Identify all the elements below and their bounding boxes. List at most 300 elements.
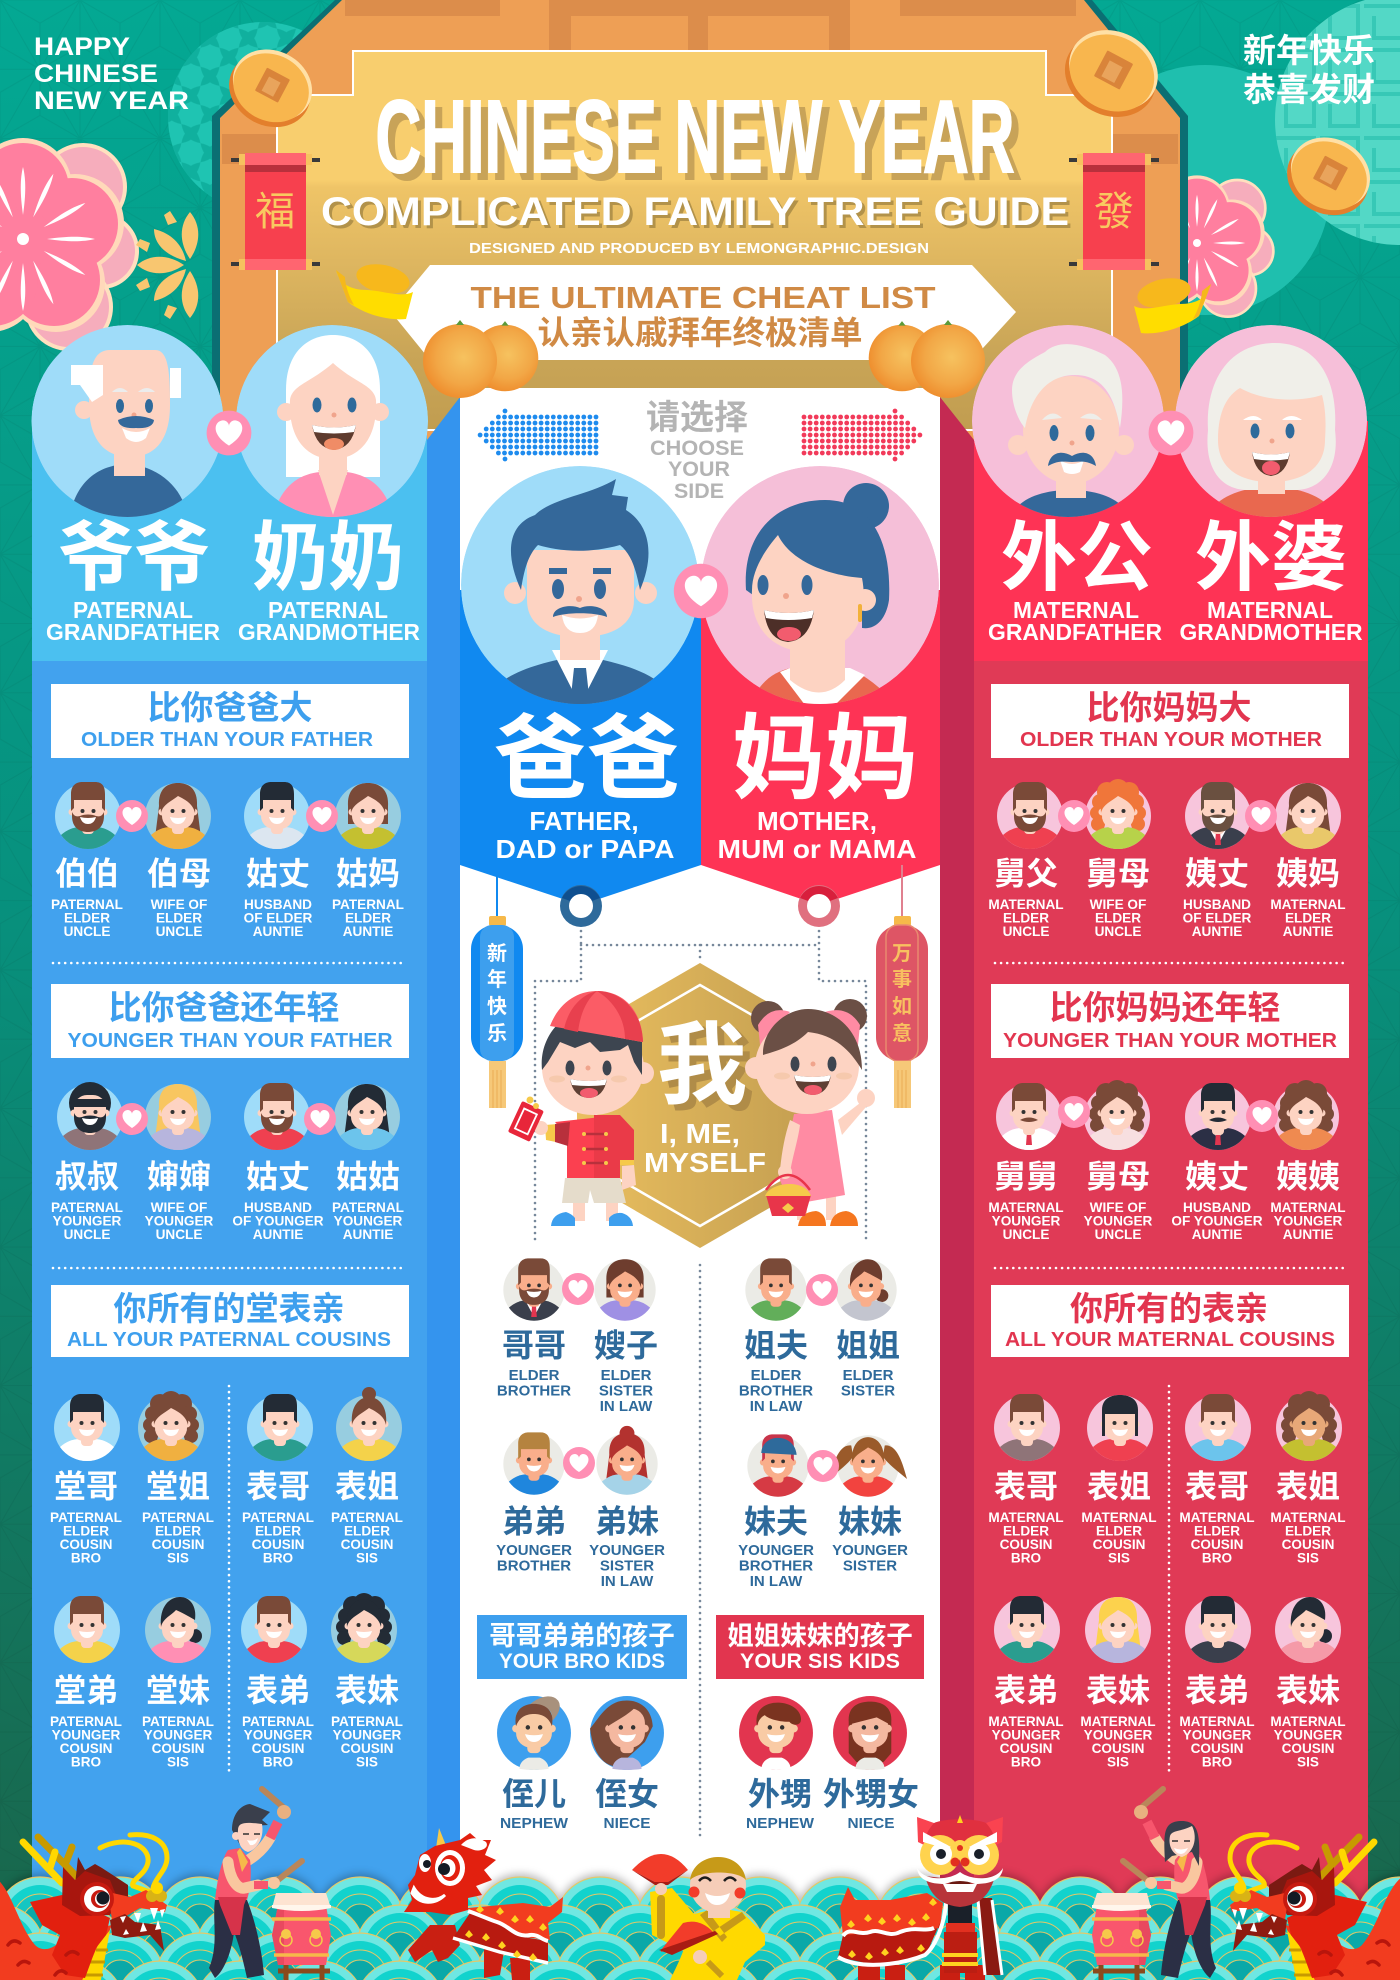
person: tang di: PATERNAL [50, 1714, 122, 1729]
label: father: DAD or PAPA [496, 834, 675, 864]
person: biao ge m1 [988, 1394, 1064, 1566]
person: jiu mu: WIFE OF [1090, 897, 1146, 912]
person: biao jie m1: SIS [1108, 1550, 1130, 1566]
text: chinese greeting [1243, 32, 1375, 108]
person: yi zhang [1183, 782, 1252, 939]
kid: niece maternal: NIECE [848, 1815, 894, 1832]
person: tang ge: COUSIN [60, 1537, 112, 1552]
icon: heart parents [674, 564, 728, 618]
label: wai gong: 外公 [1001, 516, 1153, 601]
sibling: jie jie: SISTER [841, 1383, 895, 1400]
person: biao jie: 表姐 [335, 1468, 399, 1504]
person: gu gu: AUNTIE [343, 1227, 393, 1242]
sibling: mei mei: SISTER [843, 1558, 897, 1575]
person: tang ge: ELDER [63, 1524, 109, 1538]
person: shen shen: 婶婶 [147, 1158, 211, 1194]
box: all your paternal cousins [51, 1285, 409, 1357]
sibling: sao zi: SISTER [599, 1383, 653, 1400]
person: biao jie: SIS [356, 1550, 378, 1566]
person: shu shu: PATERNAL [51, 1200, 123, 1215]
person: biao di: BRO [263, 1754, 293, 1770]
person: biao di m2: MATERNAL [1179, 1714, 1255, 1729]
person: biao mei: YOUNGER [333, 1728, 402, 1742]
panel: mother tab [701, 590, 940, 905]
credit line: DESIGNED AND PRODUCED BY LEMONGRAPHIC.DESIGN [469, 241, 929, 257]
icon: coin top right [1050, 14, 1173, 133]
person: yi ma: MATERNAL [1270, 897, 1346, 912]
monk with fan [632, 1854, 765, 1980]
label: wai po: 外婆 [1195, 516, 1347, 601]
person: biao di m1 [988, 1596, 1064, 1770]
heading: choose your side: YOUR [668, 458, 730, 481]
person: biao ge m1: 表哥 [994, 1468, 1058, 1504]
label: father: 爸爸 [494, 707, 680, 811]
icon: red lantern [876, 865, 928, 1108]
person: shen shen [145, 1084, 214, 1242]
sibling: jie fu: ELDER [751, 1367, 801, 1384]
person: biao ge: PATERNAL [242, 1510, 314, 1525]
panel: maternal side [974, 421, 1368, 1911]
person: shen shen: YOUNGER [145, 1214, 214, 1228]
person: biao ge: COUSIN [252, 1537, 304, 1552]
subtitle: COMPLICATED FAMILY TREE GUIDE [321, 190, 1069, 234]
icon: blue lantern: 乐 [487, 1022, 507, 1045]
icon: oranges right [869, 320, 985, 398]
sibling: mei fu [738, 1434, 814, 1590]
person: biao mei m2: COUSIN [1282, 1741, 1334, 1756]
portrait: paternal grandfather [32, 325, 224, 520]
sibling: di mei: SISTER [600, 1558, 654, 1575]
icon: heart [562, 1273, 594, 1305]
lion dancer right [838, 1815, 1003, 1980]
person: yi zhang younger: 姨丈 [1185, 1158, 1249, 1194]
icon: heart grandparents left [207, 411, 251, 455]
kid: niece paternal [590, 1696, 664, 1832]
badge: hexagon i me myself: I, ME, [660, 1118, 740, 1149]
person: yi zhang younger: OF YOUNGER [1171, 1214, 1263, 1228]
scroll: fa [1069, 153, 1159, 270]
person: shen shen: UNCLE [156, 1227, 202, 1242]
person: gu ma: PATERNAL [332, 897, 404, 912]
sibling: ge ge [497, 1258, 571, 1400]
icon: blue lantern [471, 865, 523, 1108]
person: biao jie [331, 1387, 403, 1566]
person: biao di m1: MATERNAL [988, 1714, 1064, 1729]
icon: ring father [560, 885, 602, 927]
sibling: di mei: YOUNGER [589, 1542, 665, 1559]
box: older than your father: 比你爸爸大 [148, 689, 312, 726]
person: biao mei m1: YOUNGER [1084, 1728, 1153, 1742]
sibling: jie fu [739, 1258, 813, 1415]
person: biao mei m1: MATERNAL [1080, 1714, 1156, 1729]
person: biao mei: SIS [356, 1754, 378, 1770]
person: biao di: COUSIN [252, 1741, 304, 1756]
person: biao di m1: COUSIN [1000, 1741, 1052, 1756]
badge: hexagon i me myself [577, 963, 823, 1248]
person: biao jie m1: COUSIN [1093, 1537, 1145, 1552]
icon: heart grandparents right [1149, 411, 1193, 455]
person: jiu fu [988, 782, 1064, 939]
sibling: ge ge: ELDER [509, 1367, 559, 1384]
person: jiu mu: 舅母 [1086, 856, 1150, 892]
heading: choose your side: CHOOSE [650, 437, 744, 460]
box: all your maternal cousins [991, 1285, 1349, 1357]
kid: niece paternal: NIECE [604, 1815, 650, 1832]
person: biao ge m2: COUSIN [1191, 1537, 1243, 1552]
icon: red lantern: 事 [892, 968, 912, 991]
panel: center white column [427, 388, 974, 1910]
person: tang mei: COUSIN [152, 1741, 204, 1756]
person: gu zhang [244, 782, 313, 939]
person: tang di [50, 1596, 122, 1770]
sibling: sao zi: 嫂子 [594, 1328, 658, 1364]
label: nai nai: 奶奶 [252, 516, 404, 601]
label: wai gong: GRANDFATHER [988, 619, 1162, 645]
person: jiu jiu [988, 1083, 1064, 1242]
person: yi zhang younger: AUNTIE [1192, 1227, 1242, 1242]
person: biao jie m2: MATERNAL [1270, 1510, 1346, 1525]
character: girl [745, 999, 875, 1226]
person: yi zhang: HUSBAND [1183, 897, 1251, 912]
person: shu shu: 叔叔 [55, 1158, 119, 1194]
person: biao di m2: YOUNGER [1183, 1728, 1252, 1742]
person: yi zhang: AUNTIE [1192, 924, 1242, 939]
label: wai gong: MATERNAL [1013, 597, 1139, 623]
sibling: di di: YOUNGER [496, 1542, 572, 1559]
sibling: sao zi: ELDER [601, 1367, 651, 1384]
box: younger than your father [51, 984, 409, 1058]
sibling: ge ge: 哥哥 [502, 1328, 566, 1364]
icon: coin top left [216, 35, 326, 141]
person: tang mei: YOUNGER [144, 1728, 213, 1742]
person: gu ma: AUNTIE [343, 924, 393, 939]
person: yi yi: YOUNGER [1274, 1214, 1343, 1228]
person: jiu fu: MATERNAL [988, 897, 1064, 912]
person: biao mei: COUSIN [341, 1741, 393, 1756]
icon: large plum flower [0, 138, 137, 349]
icon: oranges left [423, 320, 538, 398]
sibling: jie fu: 姐夫 [744, 1328, 808, 1364]
person: gu ma: ELDER [345, 910, 391, 926]
box: older than your mother: OLDER THAN YOUR MOTHER [1020, 729, 1323, 751]
person: tang ge [50, 1394, 122, 1566]
person: tang jie: 堂姐 [146, 1468, 210, 1504]
person: biao jie: PATERNAL [331, 1510, 403, 1525]
sibling: di mei: IN LAW [601, 1573, 654, 1590]
person: bo bo [51, 782, 123, 939]
person: biao mei m1: SIS [1107, 1754, 1129, 1770]
portrait: maternal grandmother [1175, 325, 1367, 520]
ribbon: the ultimate cheat list: THE ULTIMATE CHEAT LIST [470, 280, 936, 315]
icon: gold ingot right [1134, 274, 1211, 333]
title: CHINESE NEW YEAR [376, 79, 1014, 194]
person: yi yi: 姨姨 [1276, 1158, 1340, 1194]
sibling: di di: BROTHER [497, 1558, 571, 1575]
person: biao mei m1 [1080, 1597, 1156, 1770]
person: biao ge m1: ELDER [1003, 1524, 1049, 1538]
person: jiu jiu: 舅舅 [994, 1158, 1058, 1194]
character: boy [508, 991, 654, 1226]
person: bo bo: PATERNAL [51, 897, 123, 912]
sibling: jie jie: ELDER [843, 1367, 893, 1384]
person: tang mei: SIS [167, 1754, 189, 1770]
person: gu zhang younger: OF YOUNGER [232, 1214, 324, 1228]
label: mother: MUM or MAMA [718, 834, 917, 864]
box: older than your mother [991, 684, 1349, 758]
person: tang jie: ELDER [155, 1524, 201, 1538]
waves [0, 1877, 1400, 1980]
person: gu zhang: 姑丈 [246, 856, 310, 892]
person: yi zhang younger [1171, 1083, 1263, 1242]
person: gu zhang younger: 姑丈 [246, 1158, 310, 1194]
icon: gold ingot left [336, 260, 413, 319]
person: biao di m1: 表弟 [994, 1672, 1058, 1708]
box: all your maternal cousins: 你所有的表亲 [1070, 1290, 1268, 1327]
person: yi ma [1270, 783, 1346, 939]
person: biao jie m1: 表姐 [1087, 1468, 1151, 1504]
scroll: fu [231, 153, 320, 270]
person: jiu mu younger: 舅母 [1086, 1158, 1150, 1194]
person: bo mu [145, 783, 211, 939]
sibling: jie jie: 姐姐 [836, 1328, 900, 1364]
person: biao jie m1 [1081, 1395, 1157, 1566]
box: all your maternal cousins: ALL YOUR MATERNAL COUSINS [1005, 1329, 1335, 1351]
sibling: mei fu: YOUNGER [738, 1542, 814, 1559]
person: biao mei m1: COUSIN [1092, 1741, 1144, 1756]
person: biao ge m1: COUSIN [1000, 1537, 1052, 1552]
box: younger than your father: YOUNGER THAN YOUR FATHER [68, 1030, 393, 1052]
text: happy chinese new year: NEW YEAR [34, 87, 189, 115]
person: biao jie m2: SIS [1297, 1550, 1319, 1566]
label: wai po [1180, 516, 1363, 645]
box: your sis kids: YOUR SIS KIDS [740, 1650, 900, 1673]
person: biao di [241, 1596, 314, 1770]
icon: heart [116, 1103, 148, 1135]
icon: red lantern: 意 [892, 1021, 912, 1045]
person: bo bo: 伯伯 [55, 856, 119, 892]
person: biao jie m1: MATERNAL [1081, 1510, 1157, 1525]
box: your sis kids [716, 1615, 924, 1679]
ribbon: the ultimate cheat list: 认亲认戚拜年终极清单 [537, 315, 863, 351]
person: bo mu: UNCLE [156, 924, 202, 939]
box: older than your father: OLDER THAN YOUR FATHER [81, 729, 374, 751]
person: shu shu [51, 1082, 123, 1242]
family tree connector lines [535, 925, 866, 1840]
icon: heart [806, 1274, 838, 1306]
person: tang mei [142, 1597, 214, 1770]
panel: paternal side [32, 421, 427, 1911]
drummer right [1092, 1789, 1216, 1980]
person: biao jie m1: ELDER [1096, 1524, 1142, 1538]
icon: heart [563, 1447, 595, 1479]
person: tang ge: 堂哥 [54, 1468, 118, 1504]
icon: ring mother [798, 885, 840, 927]
person: biao jie m2: COUSIN [1282, 1537, 1334, 1552]
box: all your paternal cousins: ALL YOUR PATERNAL COUSINS [67, 1329, 391, 1351]
drummer left [209, 1789, 331, 1980]
sibling: mei mei: 妹妹 [838, 1504, 902, 1540]
icon: heart [1058, 800, 1090, 832]
sibling: mei fu: IN LAW [750, 1573, 803, 1590]
person: biao ge m1: MATERNAL [988, 1510, 1064, 1525]
icon: coin right [1274, 123, 1384, 229]
kid: nephew maternal: NEPHEW [746, 1815, 815, 1832]
person: bo mu: 伯母 [147, 856, 211, 892]
person: shu shu: YOUNGER [53, 1214, 122, 1228]
label: mother: MOTHER, [757, 806, 877, 836]
person: gu gu: PATERNAL [332, 1200, 404, 1215]
person: tang jie: SIS [167, 1550, 189, 1566]
person: bo mu: ELDER [156, 910, 202, 926]
person: biao jie: COUSIN [341, 1537, 393, 1552]
box: younger than your mother [991, 984, 1349, 1058]
heading: choose your side [646, 399, 748, 503]
person: jiu mu younger: UNCLE [1095, 1227, 1141, 1242]
person: tang di: COUSIN [60, 1741, 112, 1756]
person: biao ge m2: MATERNAL [1179, 1510, 1255, 1525]
person: biao ge: ELDER [255, 1524, 301, 1538]
person: tang di: BRO [71, 1754, 101, 1770]
label: ye ye: GRANDFATHER [46, 619, 220, 645]
sibling: mei fu: BROTHER [739, 1558, 813, 1575]
text: chinese greeting: 恭喜发财 [1243, 71, 1375, 108]
person: biao di m1: YOUNGER [992, 1728, 1061, 1742]
person: jiu mu younger: WIFE OF [1090, 1200, 1146, 1215]
person: biao mei m2: YOUNGER [1274, 1728, 1343, 1742]
person: tang jie: PATERNAL [142, 1510, 214, 1525]
box: younger than your mother: 比你妈妈还年轻 [1050, 989, 1280, 1026]
icon: blue lantern: 新 [487, 942, 507, 965]
text: happy chinese new year: CHINESE [34, 60, 158, 88]
box: younger than your father: 比你爸爸还年轻 [108, 989, 340, 1026]
kid: nephew paternal: NEPHEW [500, 1815, 569, 1832]
label: father: FATHER, [529, 806, 639, 836]
person: jiu mu younger [1084, 1080, 1153, 1242]
label: wai po: MATERNAL [1207, 597, 1333, 623]
person: jiu jiu: UNCLE [1003, 1227, 1049, 1242]
person: yi ma: ELDER [1285, 910, 1331, 926]
scroll: fu: 福 [255, 190, 295, 234]
kid: nephew paternal [497, 1690, 571, 1832]
label: father [494, 707, 680, 864]
person: yi yi: MATERNAL [1270, 1200, 1346, 1215]
sibling: ge ge: BROTHER [497, 1383, 571, 1400]
icon: heart [807, 1450, 839, 1482]
box: your bro kids [477, 1615, 687, 1679]
sibling: mei fu: 妹夫 [744, 1504, 808, 1540]
person: biao ge: BRO [263, 1550, 293, 1566]
sibling: di mei: 弟妹 [595, 1504, 659, 1540]
person: biao ge m2: ELDER [1194, 1524, 1240, 1538]
sibling: sao zi: IN LAW [600, 1398, 653, 1415]
person: gu gu [332, 1084, 404, 1242]
person: biao di m1: BRO [1011, 1754, 1041, 1770]
sibling: jie fu: BROTHER [739, 1383, 813, 1400]
text: happy chinese new year [34, 33, 189, 115]
sibling: jie fu: IN LAW [750, 1398, 803, 1415]
person: gu gu: 姑姑 [336, 1158, 400, 1194]
box: your bro kids: YOUR BRO KIDS [499, 1650, 665, 1673]
person: tang ge: PATERNAL [50, 1510, 122, 1525]
box: older than your mother: 比你妈妈大 [1086, 689, 1252, 726]
person: gu zhang younger: HUSBAND [244, 1200, 312, 1215]
person: jiu fu: UNCLE [1003, 924, 1049, 939]
lion dancer left [404, 1828, 563, 1980]
heading: choose your side: 请选择 [646, 399, 748, 437]
person: bo bo: ELDER [64, 910, 110, 926]
dragon left [0, 1835, 167, 1980]
person: biao jie m2: 表姐 [1276, 1468, 1340, 1504]
label: nai nai [238, 516, 420, 645]
label: ye ye [46, 516, 220, 645]
label: nai nai: PATERNAL [268, 597, 388, 623]
person: bo bo: UNCLE [64, 924, 110, 939]
person: tang di: YOUNGER [52, 1728, 121, 1742]
portrait: father [461, 466, 699, 705]
arrow: dotted blue left [475, 399, 596, 471]
person: biao ge [242, 1394, 314, 1566]
icon: red lantern: 如 [892, 995, 912, 1018]
ribbon: the ultimate cheat list [391, 265, 1016, 360]
icon: heart [304, 1103, 336, 1135]
kid: nephew maternal [739, 1696, 815, 1832]
person: biao di m2: BRO [1202, 1754, 1232, 1770]
heading: choose your side: SIDE [674, 480, 724, 503]
person: biao mei m2 [1270, 1597, 1346, 1770]
kid: nephew maternal: 外甥 [748, 1776, 812, 1812]
person: gu ma [332, 783, 404, 939]
person: biao mei m1: 表妹 [1086, 1672, 1150, 1708]
person: tang di: 堂弟 [54, 1672, 118, 1708]
person: gu zhang younger [232, 1083, 324, 1242]
person: yi yi: AUNTIE [1283, 1227, 1333, 1242]
person: yi zhang: OF ELDER [1183, 910, 1252, 926]
label: ye ye: 爷爷 [58, 516, 210, 601]
person: biao mei: 表妹 [335, 1672, 399, 1708]
label: wai gong [988, 516, 1162, 645]
person: jiu jiu: YOUNGER [992, 1214, 1061, 1228]
person: tang mei: PATERNAL [142, 1714, 214, 1729]
sibling: di di [496, 1432, 572, 1575]
sibling: mei mei [829, 1435, 908, 1575]
person: biao mei: PATERNAL [331, 1714, 403, 1729]
person: jiu mu younger: YOUNGER [1084, 1214, 1153, 1228]
sibling: sao zi [594, 1259, 658, 1415]
box: older than your father [51, 684, 409, 758]
person: biao mei [331, 1593, 403, 1770]
person: biao ge m2: BRO [1202, 1550, 1232, 1566]
scroll: fa: 發 [1094, 190, 1134, 234]
person: tang jie [138, 1391, 214, 1566]
badge: hexagon i me myself: 我 [657, 1016, 747, 1116]
box: younger than your mother: YOUNGER THAN YOUR MOTHER [1003, 1030, 1338, 1052]
person: gu ma: 姑妈 [336, 856, 400, 892]
person: gu zhang younger: AUNTIE [253, 1227, 303, 1242]
person: jiu fu: 舅父 [994, 856, 1058, 892]
icon: heart [306, 800, 338, 832]
person: biao ge m2: 表哥 [1185, 1468, 1249, 1504]
person: gu zhang: OF ELDER [244, 910, 313, 926]
person: tang ge: BRO [71, 1550, 101, 1566]
person: tang jie: COUSIN [152, 1537, 204, 1552]
person: yi zhang younger: HUSBAND [1183, 1200, 1251, 1215]
person: yi yi [1270, 1080, 1346, 1242]
person: biao jie m2: ELDER [1285, 1524, 1331, 1538]
portrait: mother [701, 466, 939, 705]
kid: niece maternal [823, 1696, 919, 1832]
person: biao di: 表弟 [246, 1672, 310, 1708]
sibling: di mei [589, 1426, 665, 1590]
